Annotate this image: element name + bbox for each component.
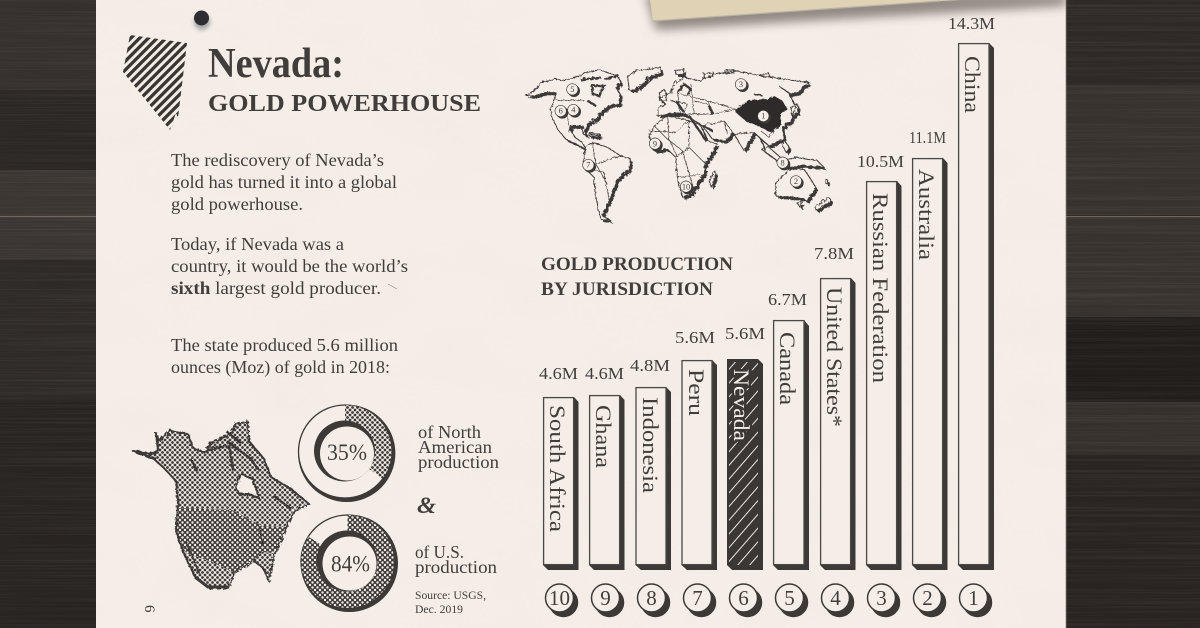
bar: South Africa: 4.6M: [539, 364, 578, 383]
title: GOLD POWERHOUSE: [208, 91, 481, 117]
bar: United States: [814, 244, 856, 570]
world map: [525, 67, 833, 223]
title: Nevada:: [208, 41, 344, 87]
text block: intro: [171, 150, 397, 214]
map marker numbers: 1: [761, 112, 765, 121]
bar: Indonesia: [630, 356, 671, 570]
bar: Russian Federation: Russian Federation: [868, 193, 893, 383]
chart heading: [541, 254, 733, 300]
text block: sixth largest: [171, 234, 408, 298]
donut chart: 84%: [301, 515, 398, 612]
text block: intro: gold has turned it into a global: [171, 172, 397, 192]
rank badges: 2: [922, 586, 933, 610]
text block: production: ounces (Moz) of gold in 2018:: [171, 357, 390, 377]
map marker numbers: 5: [570, 85, 574, 94]
bar: China: 14.3M: [948, 14, 995, 33]
chart heading: BY JURISDICTION: [541, 279, 713, 300]
donut label: North American: of North: [418, 422, 481, 442]
rank badges: 7: [692, 586, 703, 610]
page number: 6: [141, 605, 157, 613]
bar: Australia: [909, 128, 948, 570]
map: North America halftone: [132, 421, 308, 587]
bar: Canada: 6.7M: [768, 290, 807, 309]
bar: Australia: 11.1M: [909, 128, 946, 147]
map marker numbers: 9: [653, 139, 657, 148]
bar: Ghana: [585, 364, 624, 570]
map marker numbers: [559, 80, 798, 191]
rank badges: 1: [968, 586, 979, 610]
bar: Indonesia: 4.8M: [630, 356, 670, 375]
text block: sixth largest: sixth largest gold producer.: [171, 278, 381, 298]
bar: Indonesia: Indonesia: [638, 397, 663, 493]
map coast and border detail: [555, 75, 790, 200]
source note: Dec. 2019: [415, 602, 463, 616]
text block: intro: The rediscovery of Nevada’s: [171, 150, 384, 170]
rank badges: 9: [600, 586, 611, 610]
bar: Ghana: Ghana: [591, 405, 616, 468]
map marker numbers: 8: [781, 158, 785, 167]
map marker numbers: 7: [586, 161, 590, 170]
donut chart: 35%: [298, 405, 395, 502]
text block: sixth largest: country, it would be the world’s: [171, 256, 408, 276]
ampersand: &: [417, 493, 436, 518]
bar chart: [539, 14, 995, 570]
text block: production: The state produced 5.6 million: [171, 335, 398, 355]
rank badges: 6: [738, 586, 749, 610]
icon: Nevada state: [123, 35, 187, 130]
map marker numbers: 10: [682, 182, 690, 191]
map marker numbers: 3: [739, 80, 743, 89]
bar: Peru: Peru: [684, 369, 709, 416]
donut label: U.S.: production: [415, 557, 497, 577]
bar: Nevada: 5.6M: [725, 324, 765, 343]
donut label: U.S.: of U.S.: [415, 542, 464, 562]
bar: Nevada: [725, 324, 765, 570]
map marker numbers: 6: [559, 107, 563, 116]
donut label: North American: production: [418, 452, 499, 472]
rank badges: 3: [876, 586, 887, 610]
chart heading: GOLD PRODUCTION: [541, 254, 733, 275]
text block: sixth largest: Today, if Nevada was a: [171, 234, 344, 254]
bar: United States: 7.8M: [814, 244, 854, 263]
map markers: [555, 79, 803, 194]
pin: [194, 10, 210, 30]
donut chart: 35%: 35%: [327, 440, 367, 465]
text block: production: [171, 335, 398, 377]
rank badges: 8: [646, 586, 657, 610]
bar: South Africa: South Africa: [545, 405, 570, 532]
bar: Nevada: Nevada: [729, 369, 754, 441]
bar: Canada: [768, 290, 809, 570]
rank badges: 4: [830, 586, 841, 610]
donut chart: 84%: 84%: [331, 552, 370, 576]
rank badges: [546, 584, 992, 616]
bar: South Africa: [539, 364, 578, 570]
bar: Russian Federation: 10.5M: [857, 152, 904, 171]
map marker numbers: 4: [571, 106, 576, 115]
source note: Source: USGS,: [415, 588, 486, 602]
donut label: North American: American: [418, 437, 492, 457]
source note: [415, 588, 486, 616]
bar: China: China: [960, 56, 985, 113]
map marker numbers: 2: [794, 177, 798, 186]
bar: United States: United States*: [822, 287, 847, 427]
map highlight: China: [735, 95, 787, 132]
rank badges: 10: [549, 586, 570, 610]
top note: tan paper with shadow: [645, 0, 1066, 30]
text block: intro: gold powerhouse.: [171, 194, 303, 214]
rank badges: 5: [784, 586, 795, 610]
bar: Canada: Canada: [775, 332, 800, 405]
bar: Peru: 5.6M: [675, 328, 715, 347]
bar: Russian Federation: [857, 152, 904, 570]
bar: Peru: [675, 328, 717, 570]
donut label: U.S.: [415, 542, 497, 577]
title: [208, 41, 481, 117]
bar: Ghana: 4.6M: [585, 364, 624, 383]
bar: Australia: Australia: [914, 169, 939, 260]
bar: China: [948, 14, 995, 570]
donut label: North American: [418, 422, 499, 472]
